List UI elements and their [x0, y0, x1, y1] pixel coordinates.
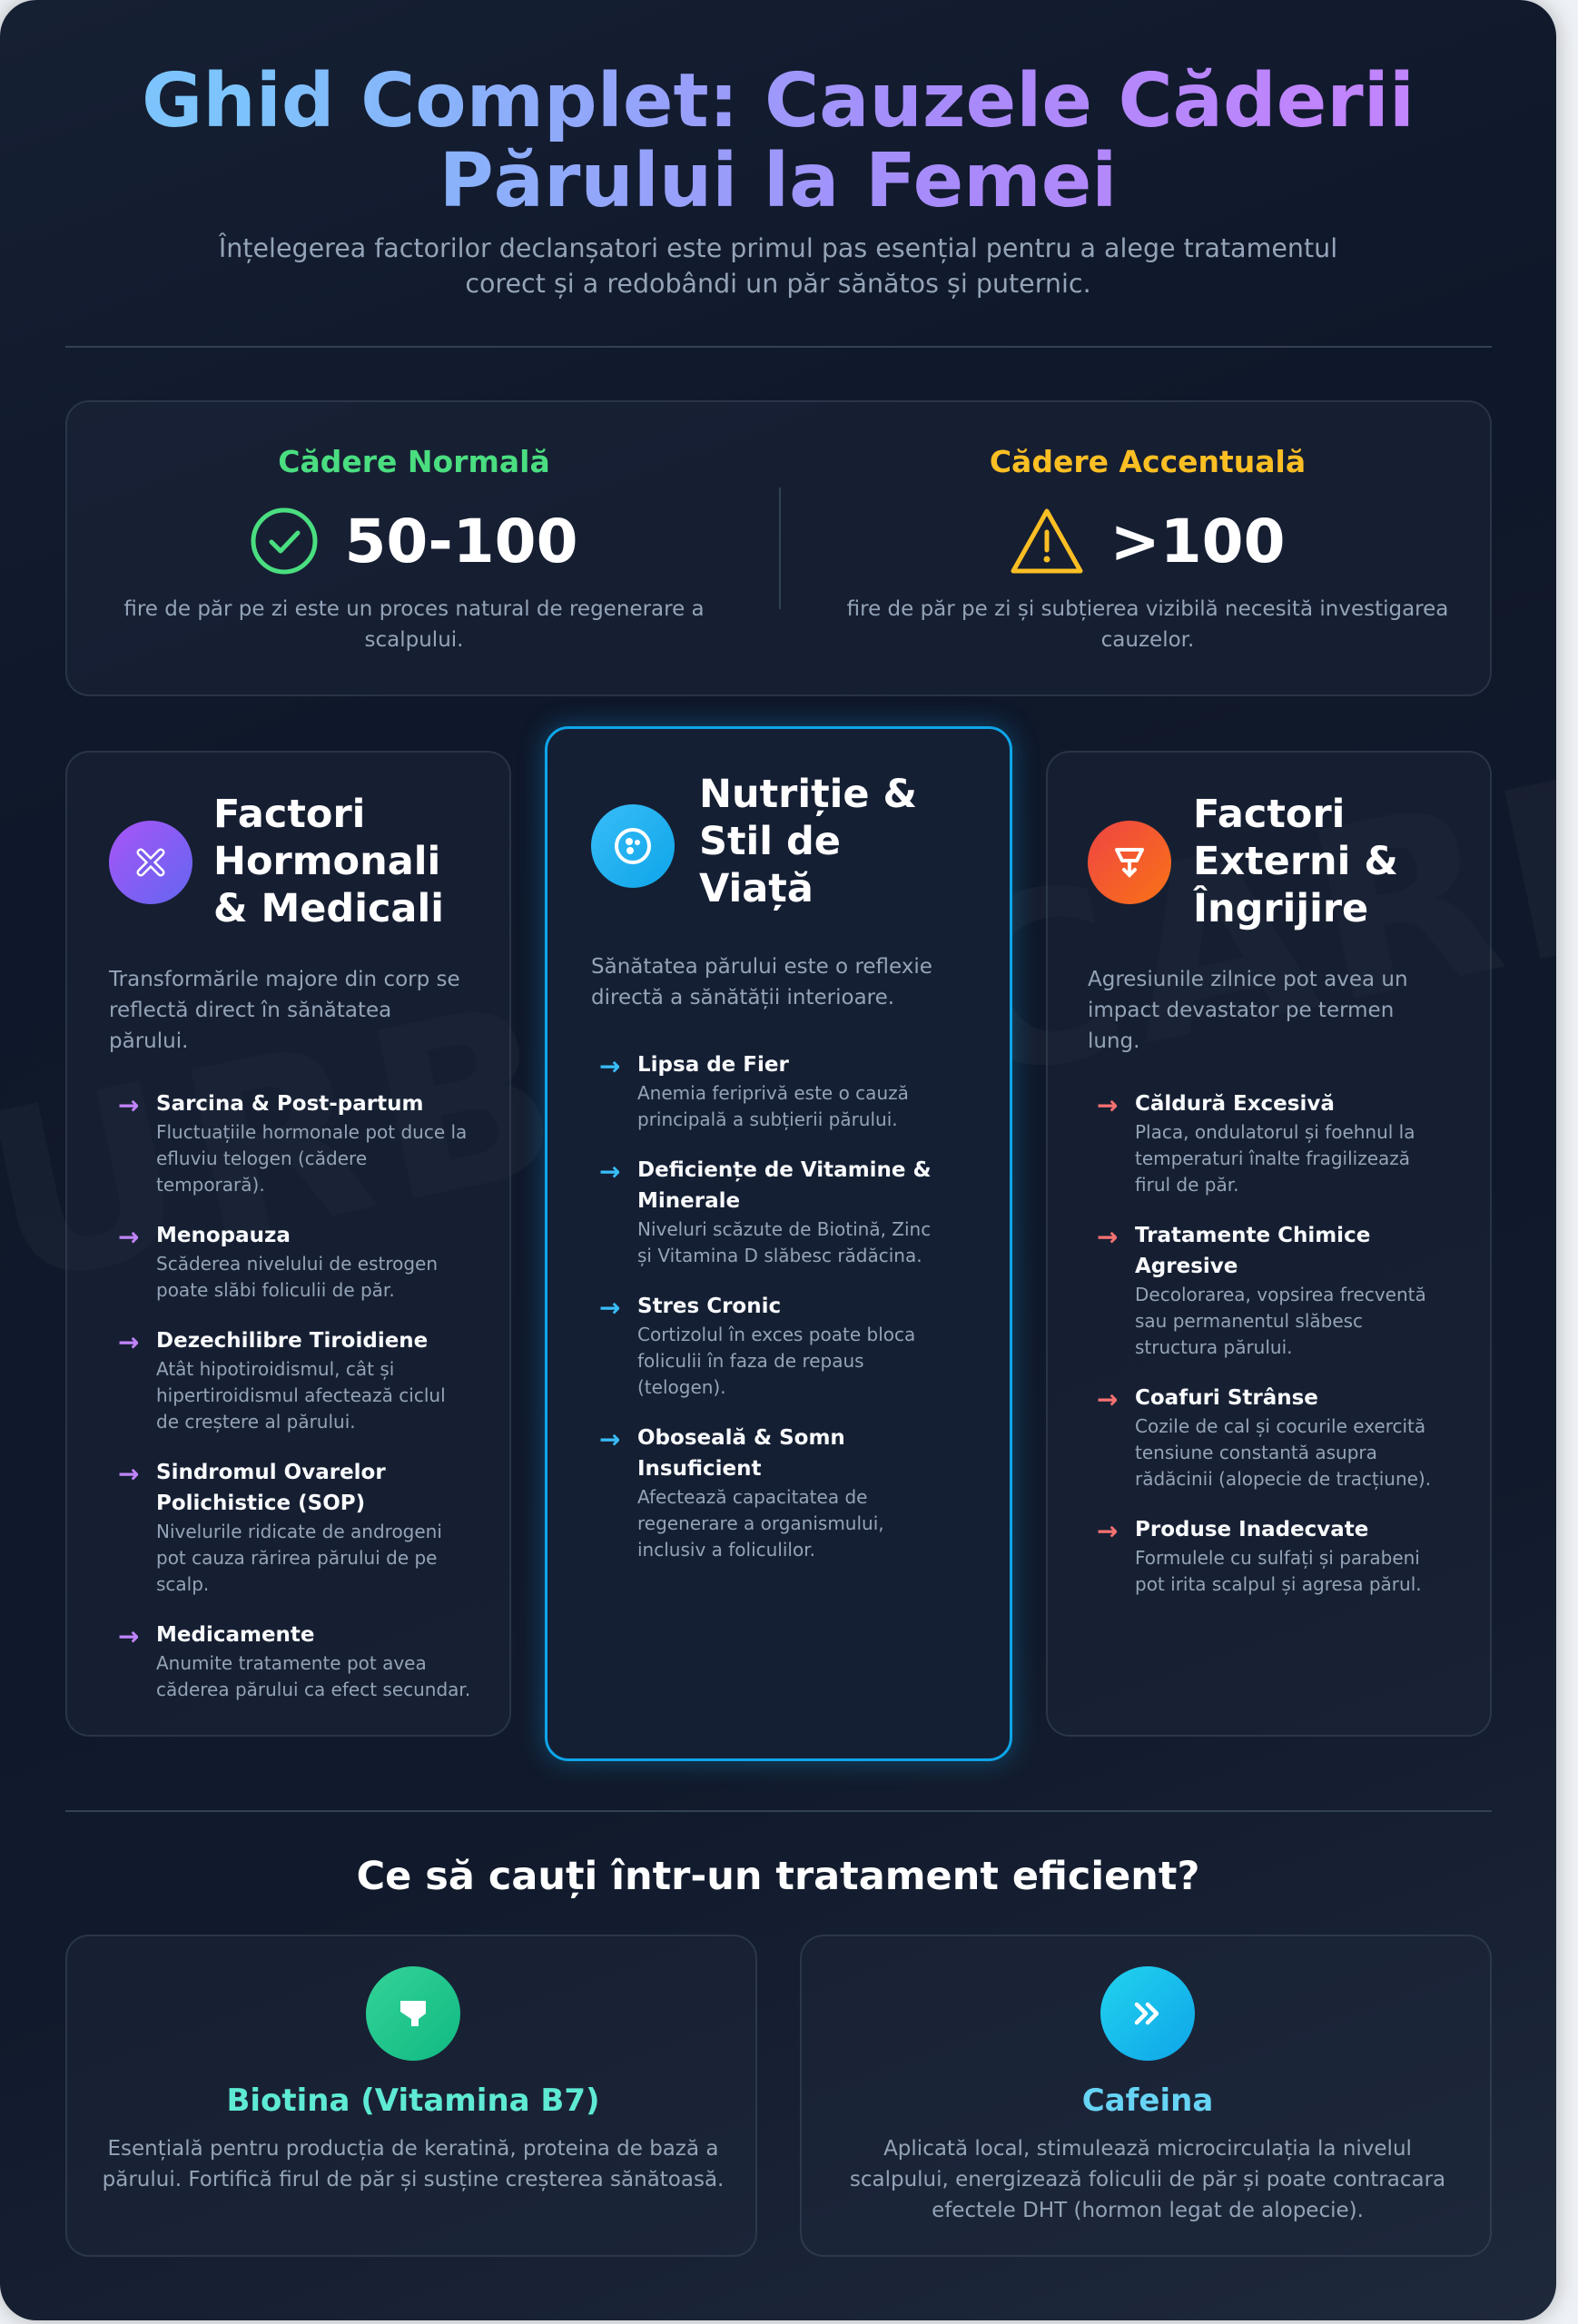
stat: accentuated: Cădere Accentuală: [990, 444, 1306, 479]
stat: normal: Cădere Normală: [278, 444, 550, 479]
title: [0, 62, 1556, 222]
list: poate slăbi foliculii de păr.: [156, 1279, 395, 1301]
heading: [1193, 792, 1398, 931]
panel: external: [1046, 751, 1492, 1737]
list: Anumite tratamente pot avea: [156, 1652, 427, 1674]
list: Oboseală & Somn Insuficient: [637, 1426, 845, 1481]
list: de creștere al părului.: [156, 1411, 356, 1433]
list: →: [599, 1293, 620, 1323]
stat: normal: 50-100: [344, 507, 577, 576]
list: →: [599, 1157, 620, 1187]
list: →: [599, 1424, 620, 1454]
panel: cafeina: [800, 1935, 1492, 2257]
heading: [213, 792, 444, 931]
description: Sănătatea părului este o reflexie directă a sănătății interioare.: [591, 955, 932, 1009]
list: →: [118, 1459, 139, 1489]
list: Decolorarea, vopsirea frecventă sau permanentul slăbesc structura părului.: [1135, 1284, 1426, 1358]
list: Menopauza: [156, 1224, 291, 1247]
title: Părului la Femei: [439, 138, 1117, 224]
list: →: [1097, 1516, 1118, 1546]
stat: accentuated: fire de păr pe zi și subțierea vizibilă necesită investigarea cauzelor.: [847, 597, 1448, 652]
list: scalp.: [156, 1573, 209, 1595]
list: Cortizolul în exces poate bloca foliculii în faza de repaus (telogen).: [637, 1324, 915, 1398]
heading: Stil de: [699, 819, 841, 864]
heading: Factori: [1193, 792, 1345, 837]
icon: nutrition: [591, 804, 675, 888]
list: →: [118, 1222, 139, 1252]
heading: Hormonali: [213, 839, 440, 884]
list: Sindromul Ovarelor: [156, 1461, 386, 1484]
panel: hormonal: [65, 751, 511, 1737]
list: căderea părului ca efect secundar.: [156, 1679, 470, 1700]
stat: accentuated: [847, 444, 1448, 652]
panel: biotina: [65, 1935, 757, 2257]
stat: accentuated: >100: [1110, 507, 1286, 576]
description: Agresiunile zilnice pot avea un impact devastator pe termen lung.: [1088, 968, 1408, 1053]
list: efluviu telogen (cădere: [156, 1147, 367, 1169]
list: pot cauza rărirea părului de pe: [156, 1547, 437, 1569]
list: →: [118, 1090, 139, 1120]
list: [599, 1051, 932, 1561]
section heading: treatment: Ce să cauți într-un tratament eficient?: [357, 1854, 1199, 1899]
list: Afectează capacitatea de regenerare a organismului, inclusiv a foliculilor.: [637, 1486, 884, 1561]
list: Fluctuațiile hormonale pot duce la: [156, 1121, 467, 1143]
heading: Nutriție &: [699, 772, 917, 817]
list: →: [118, 1327, 139, 1357]
stat: normal: fire de păr pe zi este un proces natural de regenerare a scalpului.: [123, 597, 705, 652]
list: Formulele cu sulfați și parabeni pot irita scalpul și agresa părul.: [1135, 1547, 1422, 1595]
list: Anemia feriprivă este o cauză principală a subțierii părului.: [637, 1082, 909, 1130]
title: Cafeina: [1082, 2083, 1213, 2119]
list: →: [1097, 1222, 1118, 1252]
description: Transformările majore din corp se reflectă direct în sănătatea părului.: [109, 968, 460, 1053]
list: Polichistice (SOP): [156, 1492, 365, 1515]
list: Căldură Excesivă: [1135, 1092, 1335, 1116]
list: [118, 1090, 470, 1700]
panel: stats: [65, 400, 1492, 696]
list: Coafuri Strânse: [1135, 1386, 1318, 1410]
list: Dezechilibre Tiroidiene: [156, 1329, 428, 1353]
title: Ghid Complet: Cauzele Căderii: [142, 58, 1415, 144]
list: hipertiroidismul afectează ciclul: [156, 1384, 446, 1406]
list: Sarcina & Post-partum: [156, 1092, 423, 1116]
icon: hormonal: [109, 821, 192, 904]
list: Lipsa de Fier: [637, 1053, 789, 1077]
heading: [699, 772, 917, 911]
list: Deficiențe de Vitamine & Minerale: [637, 1158, 932, 1213]
list: →: [599, 1051, 620, 1081]
list: Cozile de cal și cocurile exercită tensiune constantă asupra rădăcinii (alopecie de tracțiune).: [1135, 1415, 1431, 1490]
panel: nutrition (highlighted): [545, 726, 1012, 1761]
list: Placa, ondulatorul și foehnul la temperaturi înalte fragilizează firul de păr.: [1135, 1121, 1415, 1196]
list: Stres Cronic: [637, 1295, 781, 1318]
icon: cafeina: [1100, 1966, 1195, 2061]
list: Scăderea nivelului de estrogen: [156, 1253, 438, 1275]
list: Medicamente: [156, 1623, 315, 1647]
heading: & Medicali: [213, 886, 444, 931]
list: Niveluri scăzute de Biotină, Zinc și Vitamina D slăbesc rădăcina.: [637, 1218, 931, 1266]
list: →: [1097, 1090, 1118, 1120]
list: Produse Inadecvate: [1135, 1518, 1368, 1541]
icon: biotina: [366, 1966, 460, 2061]
heading: Factori: [213, 792, 365, 837]
stat: normal: [123, 444, 705, 652]
heading: Viață: [699, 866, 814, 911]
list: Atât hipotiroidismul, cât și: [156, 1358, 394, 1380]
icon: external: [1088, 821, 1171, 904]
list: temporară).: [156, 1174, 265, 1196]
list: Nivelurile ridicate de androgeni: [156, 1521, 442, 1542]
description: Esențială pentru producția de keratină, proteina de bază a părului. Fortifică firul de păr și susține creșterea sănătoasă.: [103, 2137, 724, 2191]
list: →: [1097, 1384, 1118, 1414]
heading: Externi &: [1193, 839, 1398, 884]
list: →: [118, 1621, 139, 1651]
title: Biotina (Vitamina B7): [226, 2083, 600, 2119]
list: [1097, 1090, 1431, 1595]
subtitle: Înțelegerea factorilor declanșatori este primul pas esențial pentru a alege tratamentul corect și a redobândi un păr sănătos și puternic.: [219, 233, 1337, 299]
heading: Îngrijire: [1193, 886, 1368, 931]
list: Tratamente Chimice Agresive: [1135, 1224, 1370, 1278]
description: Aplicată local, stimulează microcirculația la nivelul scalpului, energizează foliculii de păr și poate contracara efectele DHT (hormon legat de alopecie).: [850, 2137, 1445, 2222]
